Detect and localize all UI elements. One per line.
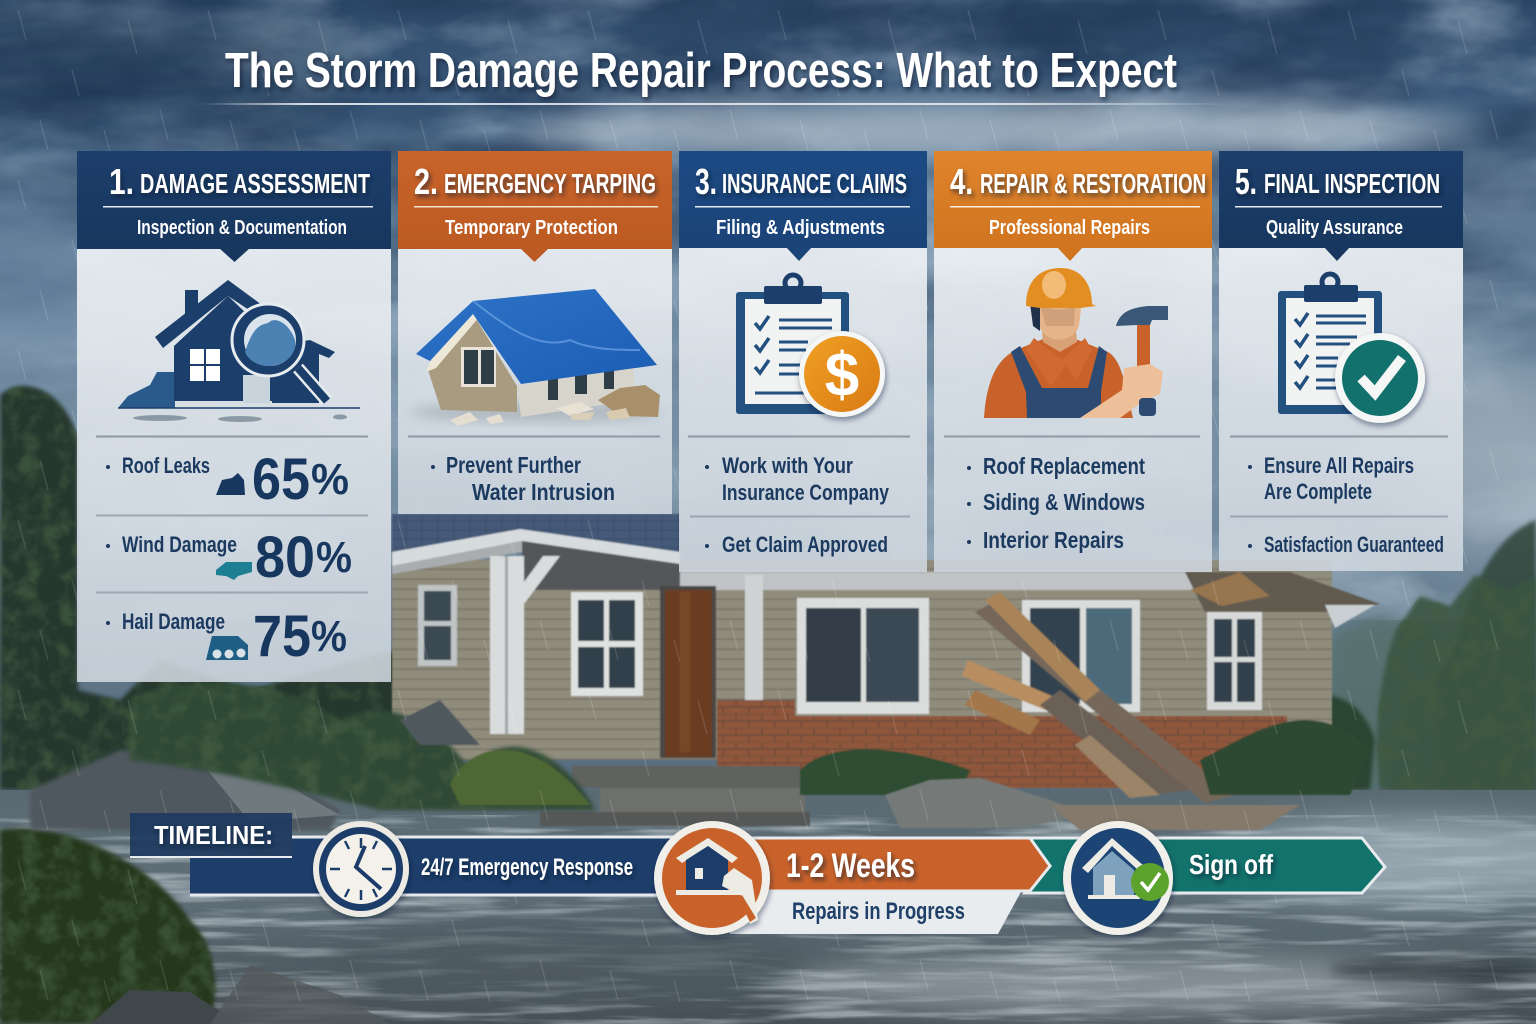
heading: step 1: 1. xyxy=(109,161,134,202)
stat: roof leaks 65%: Roof Leaks xyxy=(122,453,210,478)
text: get claim approved: Get Claim Approved xyxy=(722,532,888,557)
panel: step 2 emergency tarping xyxy=(398,151,672,514)
text: work with insurance: Work with Your xyxy=(722,453,853,478)
shrubs and rocks xyxy=(130,683,1370,830)
icon: construction worker with hammer xyxy=(984,268,1168,418)
heading: step 3: INSURANCE CLAIMS xyxy=(722,168,907,199)
entry steps xyxy=(540,766,810,826)
text: satisfaction guaranteed: Satisfaction Guaranteed xyxy=(1264,532,1444,557)
fallen boards xyxy=(962,592,1235,803)
house windows xyxy=(418,575,1262,725)
panel: step 1 damage assessment: Inspection & Documentation xyxy=(137,216,347,239)
text: prevent water intrusion xyxy=(431,452,615,505)
stat: roof leaks 65% xyxy=(106,447,349,512)
stat: hail damage 75%: Hail Damage xyxy=(122,609,225,634)
text: prevent water intrusion: Water Intrusion xyxy=(472,479,615,505)
heading: step 5: 5. xyxy=(1235,161,1257,202)
text: ensure repairs complete: Are Complete xyxy=(1264,479,1372,504)
text: ensure repairs complete: Ensure All Repairs xyxy=(1264,453,1414,478)
text: satisfaction guaranteed xyxy=(1248,532,1444,557)
heading: step 1 xyxy=(109,161,370,202)
icon: hail car xyxy=(206,636,248,660)
list: repair items: Interior Repairs xyxy=(983,527,1124,553)
icon: clipboard with dollar coin: $ xyxy=(825,341,859,410)
icon: clipboard with dollar coin xyxy=(736,275,885,417)
heading: step 4 xyxy=(950,161,1206,202)
heading: step 3: 3. xyxy=(695,161,717,202)
segment: sign off arrow: Sign off xyxy=(1189,849,1274,880)
text: prevent water intrusion: Prevent Further xyxy=(446,452,581,478)
panel: step 4 repair and restoration xyxy=(934,151,1212,572)
list: repair items xyxy=(967,453,1145,553)
icon: clock xyxy=(313,821,409,917)
front door xyxy=(660,586,716,758)
heading: step 2 xyxy=(414,161,656,202)
porch column xyxy=(490,556,560,734)
icon: house with magnifying glass xyxy=(118,280,360,422)
icon: clipboard with check badge xyxy=(1278,274,1425,423)
panel: step 3 insurance claims xyxy=(679,151,927,572)
panel: step 5 final inspection: Quality Assurance xyxy=(1266,216,1403,239)
heading: step 4: REPAIR & RESTORATION xyxy=(980,168,1206,199)
segment: repairs in progress caption xyxy=(730,890,1022,934)
segment: repairs in progress caption: Repairs in Progress xyxy=(792,898,965,925)
panel: step 4 repair and restoration: Professional Repairs xyxy=(989,216,1150,239)
text: work with insurance: Insurance Company xyxy=(722,480,890,505)
segment: 1-2 weeks arrow: 1-2 Weeks xyxy=(786,847,915,885)
segment: emergency response xyxy=(190,837,680,895)
segment: 1-2 weeks arrow xyxy=(730,838,1050,891)
timeline label xyxy=(130,813,292,858)
list: repair items: Roof Replacement xyxy=(983,453,1145,479)
icon: wind gust xyxy=(216,562,252,580)
stat: wind damage 80%: Wind Damage xyxy=(122,532,237,557)
stat: wind damage 80% xyxy=(106,525,352,590)
storm background scene xyxy=(0,0,1536,790)
icon: house repair badge xyxy=(654,821,770,935)
panel: step 3 insurance claims: Filing & Adjustments xyxy=(716,216,885,239)
damaged house xyxy=(130,514,1380,830)
panel: step 2 emergency tarping: Temporary Protection xyxy=(445,216,618,239)
brick foundation xyxy=(717,700,1287,788)
stat: roof leaks 65%: % xyxy=(311,455,349,504)
text: ensure repairs complete xyxy=(1248,453,1414,504)
stat: hail damage 75%: 75 xyxy=(253,604,311,669)
heading: step 4: 4. xyxy=(950,161,973,202)
stat: roof leaks 65%: 65 xyxy=(252,447,310,512)
heading: step 1: DAMAGE ASSESSMENT xyxy=(140,168,370,199)
stat: wind damage 80%: 80 xyxy=(255,525,315,590)
heading: step 5: FINAL INSPECTION xyxy=(1264,168,1440,199)
list: repair items: Siding & Windows xyxy=(983,489,1145,515)
ground and flood water xyxy=(0,750,1536,1024)
icon: house with green check xyxy=(1063,821,1173,935)
heading: step 2: EMERGENCY TARPING xyxy=(444,168,656,199)
heading: step 5 xyxy=(1235,161,1440,202)
segment: sign off arrow xyxy=(1025,838,1385,893)
panel: step 5 final inspection xyxy=(1219,151,1463,571)
segment: emergency response: 24/7 Emergency Response xyxy=(421,854,633,881)
text: work with insurance xyxy=(705,453,890,505)
stat: wind damage 80%: % xyxy=(316,533,352,582)
stat: hail damage 75% xyxy=(106,604,347,669)
title: The Storm Damage Repair Process: What to Expect xyxy=(225,44,1177,98)
heading: step 2: 2. xyxy=(414,161,438,202)
icon: tarped house xyxy=(410,289,660,426)
heading: step 3 xyxy=(695,161,907,202)
stat: hail damage 75%: % xyxy=(311,612,347,661)
timeline xyxy=(130,813,1385,935)
icon: leak cloud xyxy=(216,473,245,495)
trees left and right xyxy=(0,386,1536,790)
timeline label: TIMELINE: xyxy=(154,820,273,850)
panel: step 1 damage assessment xyxy=(77,151,391,682)
